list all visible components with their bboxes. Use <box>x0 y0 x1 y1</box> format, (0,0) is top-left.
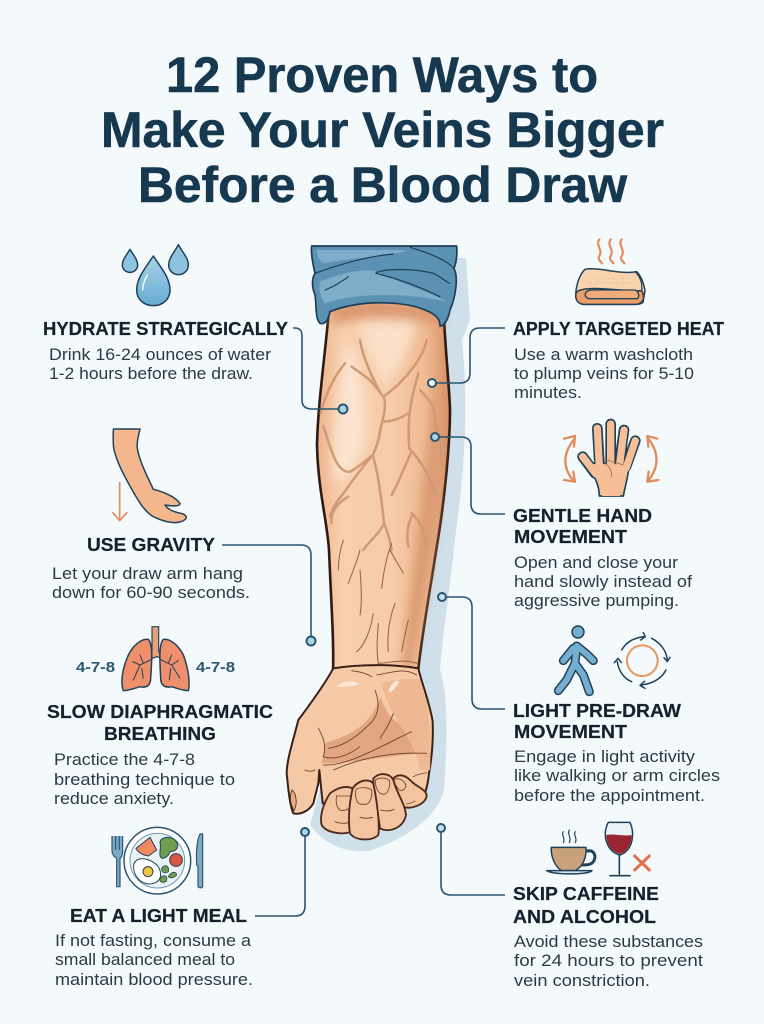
leader line: caffeine <box>437 824 505 895</box>
heading: HYDRATE STRATEGICALLY <box>43 318 289 339</box>
body text <box>514 346 694 402</box>
title <box>101 47 664 213</box>
body text: Practice the 4-7-8 <box>54 751 195 769</box>
panel: hand movement <box>513 424 692 610</box>
body text: Drink 16-24 ounces of water <box>49 346 272 364</box>
hand <box>287 665 433 814</box>
body text: for 24 hours to prevent <box>514 952 704 970</box>
heading <box>513 505 652 547</box>
icon: warm towel <box>576 239 645 304</box>
fingers <box>321 774 427 839</box>
heading: APPLY TARGETED HEAT <box>513 318 725 339</box>
shirt sleeve <box>311 246 457 326</box>
arm shadow <box>310 258 470 851</box>
heading: USE GRAVITY <box>87 534 216 555</box>
body text <box>514 554 692 610</box>
body text: minutes. <box>514 384 582 402</box>
body text: before the appointment. <box>514 787 705 805</box>
heading: GENTLE HAND <box>513 505 652 526</box>
body text: maintain blood pressure. <box>55 971 253 989</box>
heading: SKIP CAFFEINE <box>513 883 659 904</box>
body text: breathing technique to <box>54 771 235 789</box>
body text <box>514 933 704 990</box>
body text: hand slowly instead of <box>514 573 692 591</box>
body text <box>52 565 250 602</box>
body text: to plump veins for 5-10 <box>514 365 694 383</box>
body text: down for 60-90 seconds. <box>52 584 250 602</box>
body text: Let your draw arm hang <box>52 565 243 583</box>
icon: lungs with 4-7-8 labels: 4-7-8 <box>76 659 115 676</box>
icon: coffee cup and wine glass with cross <box>547 822 649 876</box>
leader line: pre-draw movement <box>438 593 505 709</box>
icon: lungs with 4-7-8 labels: 4-7-8 <box>196 659 235 676</box>
body text: reduce anxiety. <box>54 790 174 808</box>
veins upper <box>321 340 441 550</box>
veins lower and tendons <box>338 540 417 663</box>
heading: BREATHING <box>104 723 216 744</box>
body text <box>55 932 253 989</box>
panel: gravity <box>52 429 250 602</box>
body text: aggressive pumping. <box>514 592 679 610</box>
icon: walking person and circular arrows <box>558 626 670 692</box>
heading <box>513 700 682 742</box>
leader line: hand movement <box>431 433 505 514</box>
heading: MOVEMENT <box>514 526 628 547</box>
body text: vein constriction. <box>514 972 650 990</box>
forearm highlights <box>330 299 442 668</box>
panel: breathing <box>47 627 273 808</box>
body text: small balanced meal to <box>55 951 235 969</box>
body text <box>49 346 272 383</box>
heading <box>513 883 659 927</box>
panel: caffeine and alcohol <box>513 822 704 990</box>
forearm <box>317 298 450 672</box>
thumb nail <box>290 790 296 811</box>
fingernails <box>335 778 415 823</box>
leader line: hydrate <box>293 328 348 414</box>
body text: Use a warm washcloth <box>514 346 693 364</box>
heading: LIGHT PRE-DRAW <box>513 700 682 721</box>
body text: Open and close your <box>514 554 679 572</box>
icon: water drops <box>122 245 188 306</box>
title: Before a Blood Draw <box>138 157 627 213</box>
panel: heat <box>513 239 725 402</box>
leader line: heat <box>428 328 505 387</box>
heading: AND ALCOHOL <box>513 906 656 927</box>
heading <box>47 701 273 744</box>
leader line: meal <box>255 828 309 916</box>
icon: hanging arm <box>113 429 186 523</box>
palm creases <box>305 671 427 777</box>
title: Make Your Veins Bigger <box>101 102 664 158</box>
body text <box>54 751 235 808</box>
palm shading <box>322 697 431 763</box>
panel: meal <box>55 827 253 989</box>
icon: open hand with arrows <box>564 424 658 496</box>
body text: 1-2 hours before the draw. <box>49 365 253 383</box>
panel: pre-draw movement <box>513 626 720 805</box>
title: 12 Proven Ways to <box>166 47 598 103</box>
body text: If not fasting, consume a <box>55 932 252 950</box>
body text: Avoid these substances <box>514 933 703 951</box>
illustration: forearm with veins <box>287 246 470 851</box>
icon: lungs with 4-7-8 labels <box>76 627 235 691</box>
heading: SLOW DIAPHRAGMATIC <box>47 701 273 722</box>
heading: MOVEMENT <box>514 721 628 742</box>
body text <box>514 748 720 805</box>
leader line: gravity <box>222 545 316 646</box>
body text: like walking or arm circles <box>514 767 720 785</box>
heading: EAT A LIGHT MEAL <box>70 905 247 926</box>
panel: hydrate <box>43 245 289 383</box>
body text: Engage in light activity <box>514 748 696 766</box>
icon: plate with fork and knife <box>112 827 203 894</box>
